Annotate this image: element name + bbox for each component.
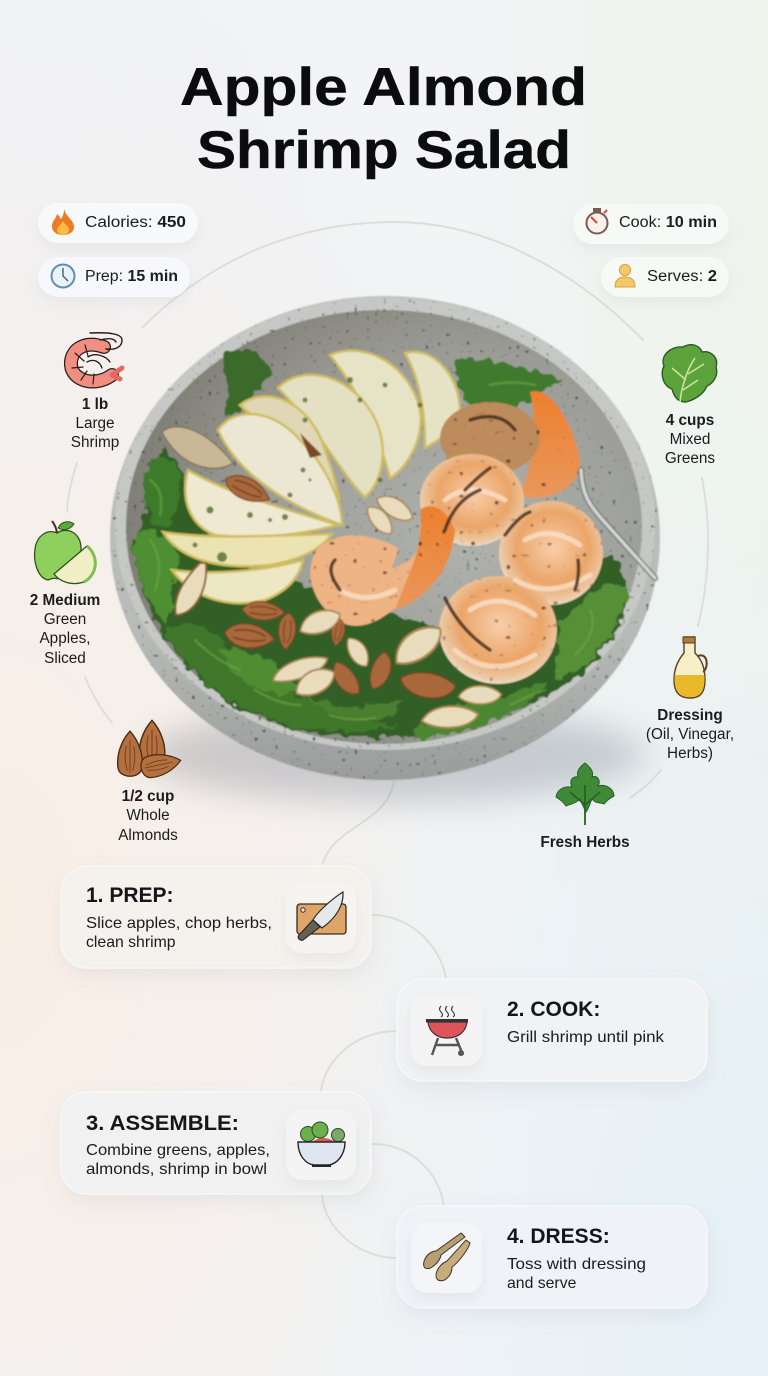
ingredient: shrimp: 1 lb: [82, 396, 108, 413]
icon: oil bottle: [674, 637, 707, 698]
salad bowl photo: [110, 296, 660, 780]
ingredient: almonds: [118, 720, 183, 844]
ingredient: shrimp: Large: [75, 415, 115, 432]
ingredient: almonds: Whole: [126, 807, 170, 824]
ingredient: almonds: 1/2 cup: [122, 788, 174, 805]
step 2 card: Grill shrimp until pink: [507, 1029, 664, 1046]
stat pill: prep: [38, 257, 190, 297]
stat pill: calories: [38, 203, 198, 243]
ingredient: dressing: (Oil, Vinegar,: [646, 726, 734, 743]
lettuce crinkle highlights: [150, 382, 593, 719]
bowl interior: [126, 310, 642, 744]
ingredient: almonds: Almonds: [118, 827, 178, 844]
icon tile: grill: [411, 996, 482, 1066]
step 4 card: Toss with dressing: [507, 1256, 646, 1273]
icon: shrimp: [71, 333, 122, 384]
ingredient: dressing: [646, 637, 734, 762]
icon: green apple: [35, 521, 95, 584]
ingredient: mixed greens: 4 cups: [666, 412, 714, 429]
step 3 card: [61, 1092, 371, 1194]
ingredient: apples: [30, 521, 100, 667]
shrimp char marks: [331, 417, 579, 650]
stat pill: prep: Prep: 15 min: [85, 268, 178, 285]
icon: clock: [52, 264, 74, 288]
ingredient: fresh herbs: Fresh Herbs: [540, 834, 630, 851]
stat pill: cook: Cook: 10 min: [619, 214, 717, 231]
ingredient: shrimp: Shrimp: [71, 434, 119, 451]
title: [180, 58, 587, 180]
step 3 card: Combine greens, apples,: [86, 1142, 270, 1159]
title: Shrimp Salad: [197, 121, 571, 180]
connector lines: [67, 222, 708, 1258]
shrimp highlights: [340, 490, 590, 666]
ingredient: dressing: Dressing: [657, 707, 723, 724]
ingredient: mixed greens: Mixed: [670, 431, 710, 448]
step 1 card: [61, 866, 371, 968]
step 4 card: [397, 1206, 707, 1308]
ingredient: fresh herbs: [540, 763, 630, 851]
title: Apple Almond: [180, 58, 587, 117]
icon tile: salad tongs: [411, 1223, 482, 1293]
bowl rim: [115, 298, 655, 750]
stat pill: serves: Serves: 2: [647, 268, 717, 285]
ingredient: apples: Apples,: [39, 630, 91, 647]
bowl outer wall: [110, 296, 660, 780]
fork: [581, 470, 655, 578]
ingredient: mixed greens: [662, 345, 717, 467]
icon tile: salad bowl: [286, 1110, 356, 1180]
ingredient: apples: Green: [44, 611, 86, 628]
whole almonds on apples: [162, 427, 322, 615]
step 3 card: 3. ASSEMBLE:: [86, 1112, 239, 1135]
step 4 card: and serve: [507, 1275, 577, 1292]
icon: lettuce: [662, 345, 717, 402]
stat pill: serves: [601, 257, 729, 297]
step 4 card: 4. DRESS:: [507, 1225, 610, 1248]
ingredient: dressing: Herbs): [667, 745, 713, 762]
step 2 card: [397, 979, 707, 1081]
icon tile: cutting board and knife: [286, 883, 356, 953]
ingredient: apples: Sliced: [44, 650, 86, 667]
icon: flame: [52, 209, 74, 235]
step 1 card: Slice apples, chop herbs,: [86, 915, 272, 932]
icon: parsley: [556, 763, 614, 825]
step 2 card: 2. COOK:: [507, 998, 600, 1021]
bowl shadow: [145, 707, 645, 803]
stat pill: cook: [573, 204, 729, 244]
step 1 card: 1. PREP:: [86, 884, 174, 907]
salad greens: [132, 349, 628, 740]
stat pill: calories: Calories: 450: [85, 214, 186, 231]
apple slices: [163, 351, 460, 603]
shrimp: [310, 391, 603, 684]
icon: person: [615, 264, 635, 287]
icon: almonds: [118, 720, 183, 780]
step 3 card: almonds, shrimp in bowl: [86, 1161, 267, 1178]
icon: timer: [586, 208, 608, 234]
ingredient: apples: 2 Medium: [30, 592, 100, 609]
ingredient: mixed greens: Greens: [665, 450, 715, 467]
step 1 card: clean shrimp: [86, 934, 176, 951]
herb flecks: [192, 377, 422, 562]
almonds on greens: [223, 488, 502, 729]
ingredient: shrimp: [71, 333, 122, 451]
